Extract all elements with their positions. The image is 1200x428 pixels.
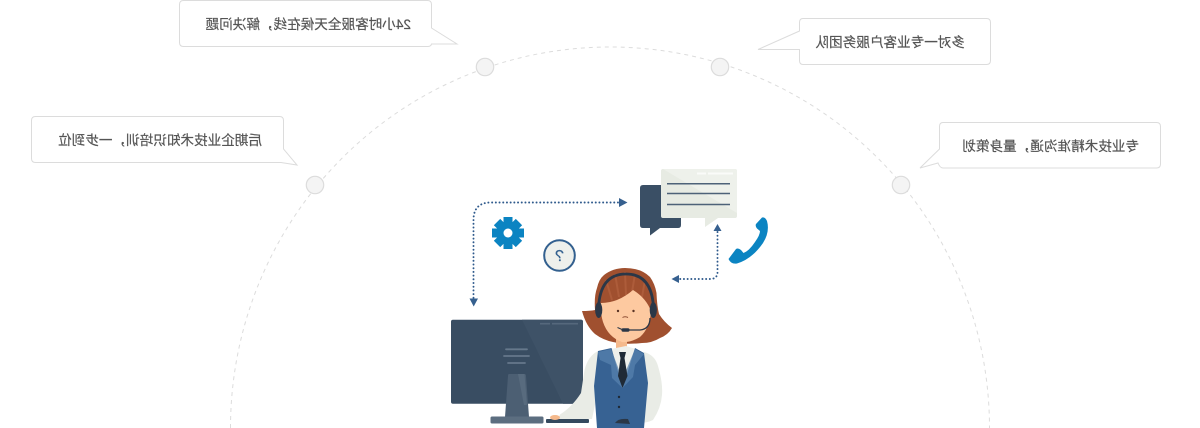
icon: phone xyxy=(728,217,768,264)
hair xyxy=(582,268,672,344)
callout: training xyxy=(32,116,297,165)
face xyxy=(601,290,651,342)
illustration: agent xyxy=(550,268,672,428)
callout: communication: 专业技术精准沟通，量身策划 xyxy=(962,138,1139,154)
callout: dedicated team xyxy=(758,18,990,64)
arrow: top dotted loop xyxy=(470,198,628,306)
icon: gear xyxy=(492,217,524,249)
dashed arc xyxy=(230,47,990,428)
eyes and mouth xyxy=(617,310,635,318)
hand on mouse xyxy=(615,419,630,424)
illustration: keyboard xyxy=(546,419,589,423)
arc nodes xyxy=(306,58,910,194)
callout: communication xyxy=(920,122,1160,168)
callout: training: 后期企业技术知识培训，一步到位 xyxy=(58,132,262,148)
buttons xyxy=(618,396,620,398)
callout: dedicated team: 多对一专业客户服务团队 xyxy=(815,34,965,50)
icon: chat bubbles xyxy=(640,169,737,236)
icon: question clock: ? xyxy=(555,248,564,265)
hand xyxy=(550,415,560,420)
headset xyxy=(595,274,657,332)
illustration: monitor xyxy=(451,320,583,424)
neck xyxy=(616,338,627,353)
icon: question clock xyxy=(544,240,575,271)
arrow: right dotted loop xyxy=(672,224,722,283)
callout: 24 hour service xyxy=(180,0,457,46)
shirt and arms xyxy=(558,351,598,419)
callout: 24 hour service: 24小时客服全天候在线，解决问题 xyxy=(205,16,411,32)
tie xyxy=(618,352,628,388)
vest xyxy=(594,348,648,428)
